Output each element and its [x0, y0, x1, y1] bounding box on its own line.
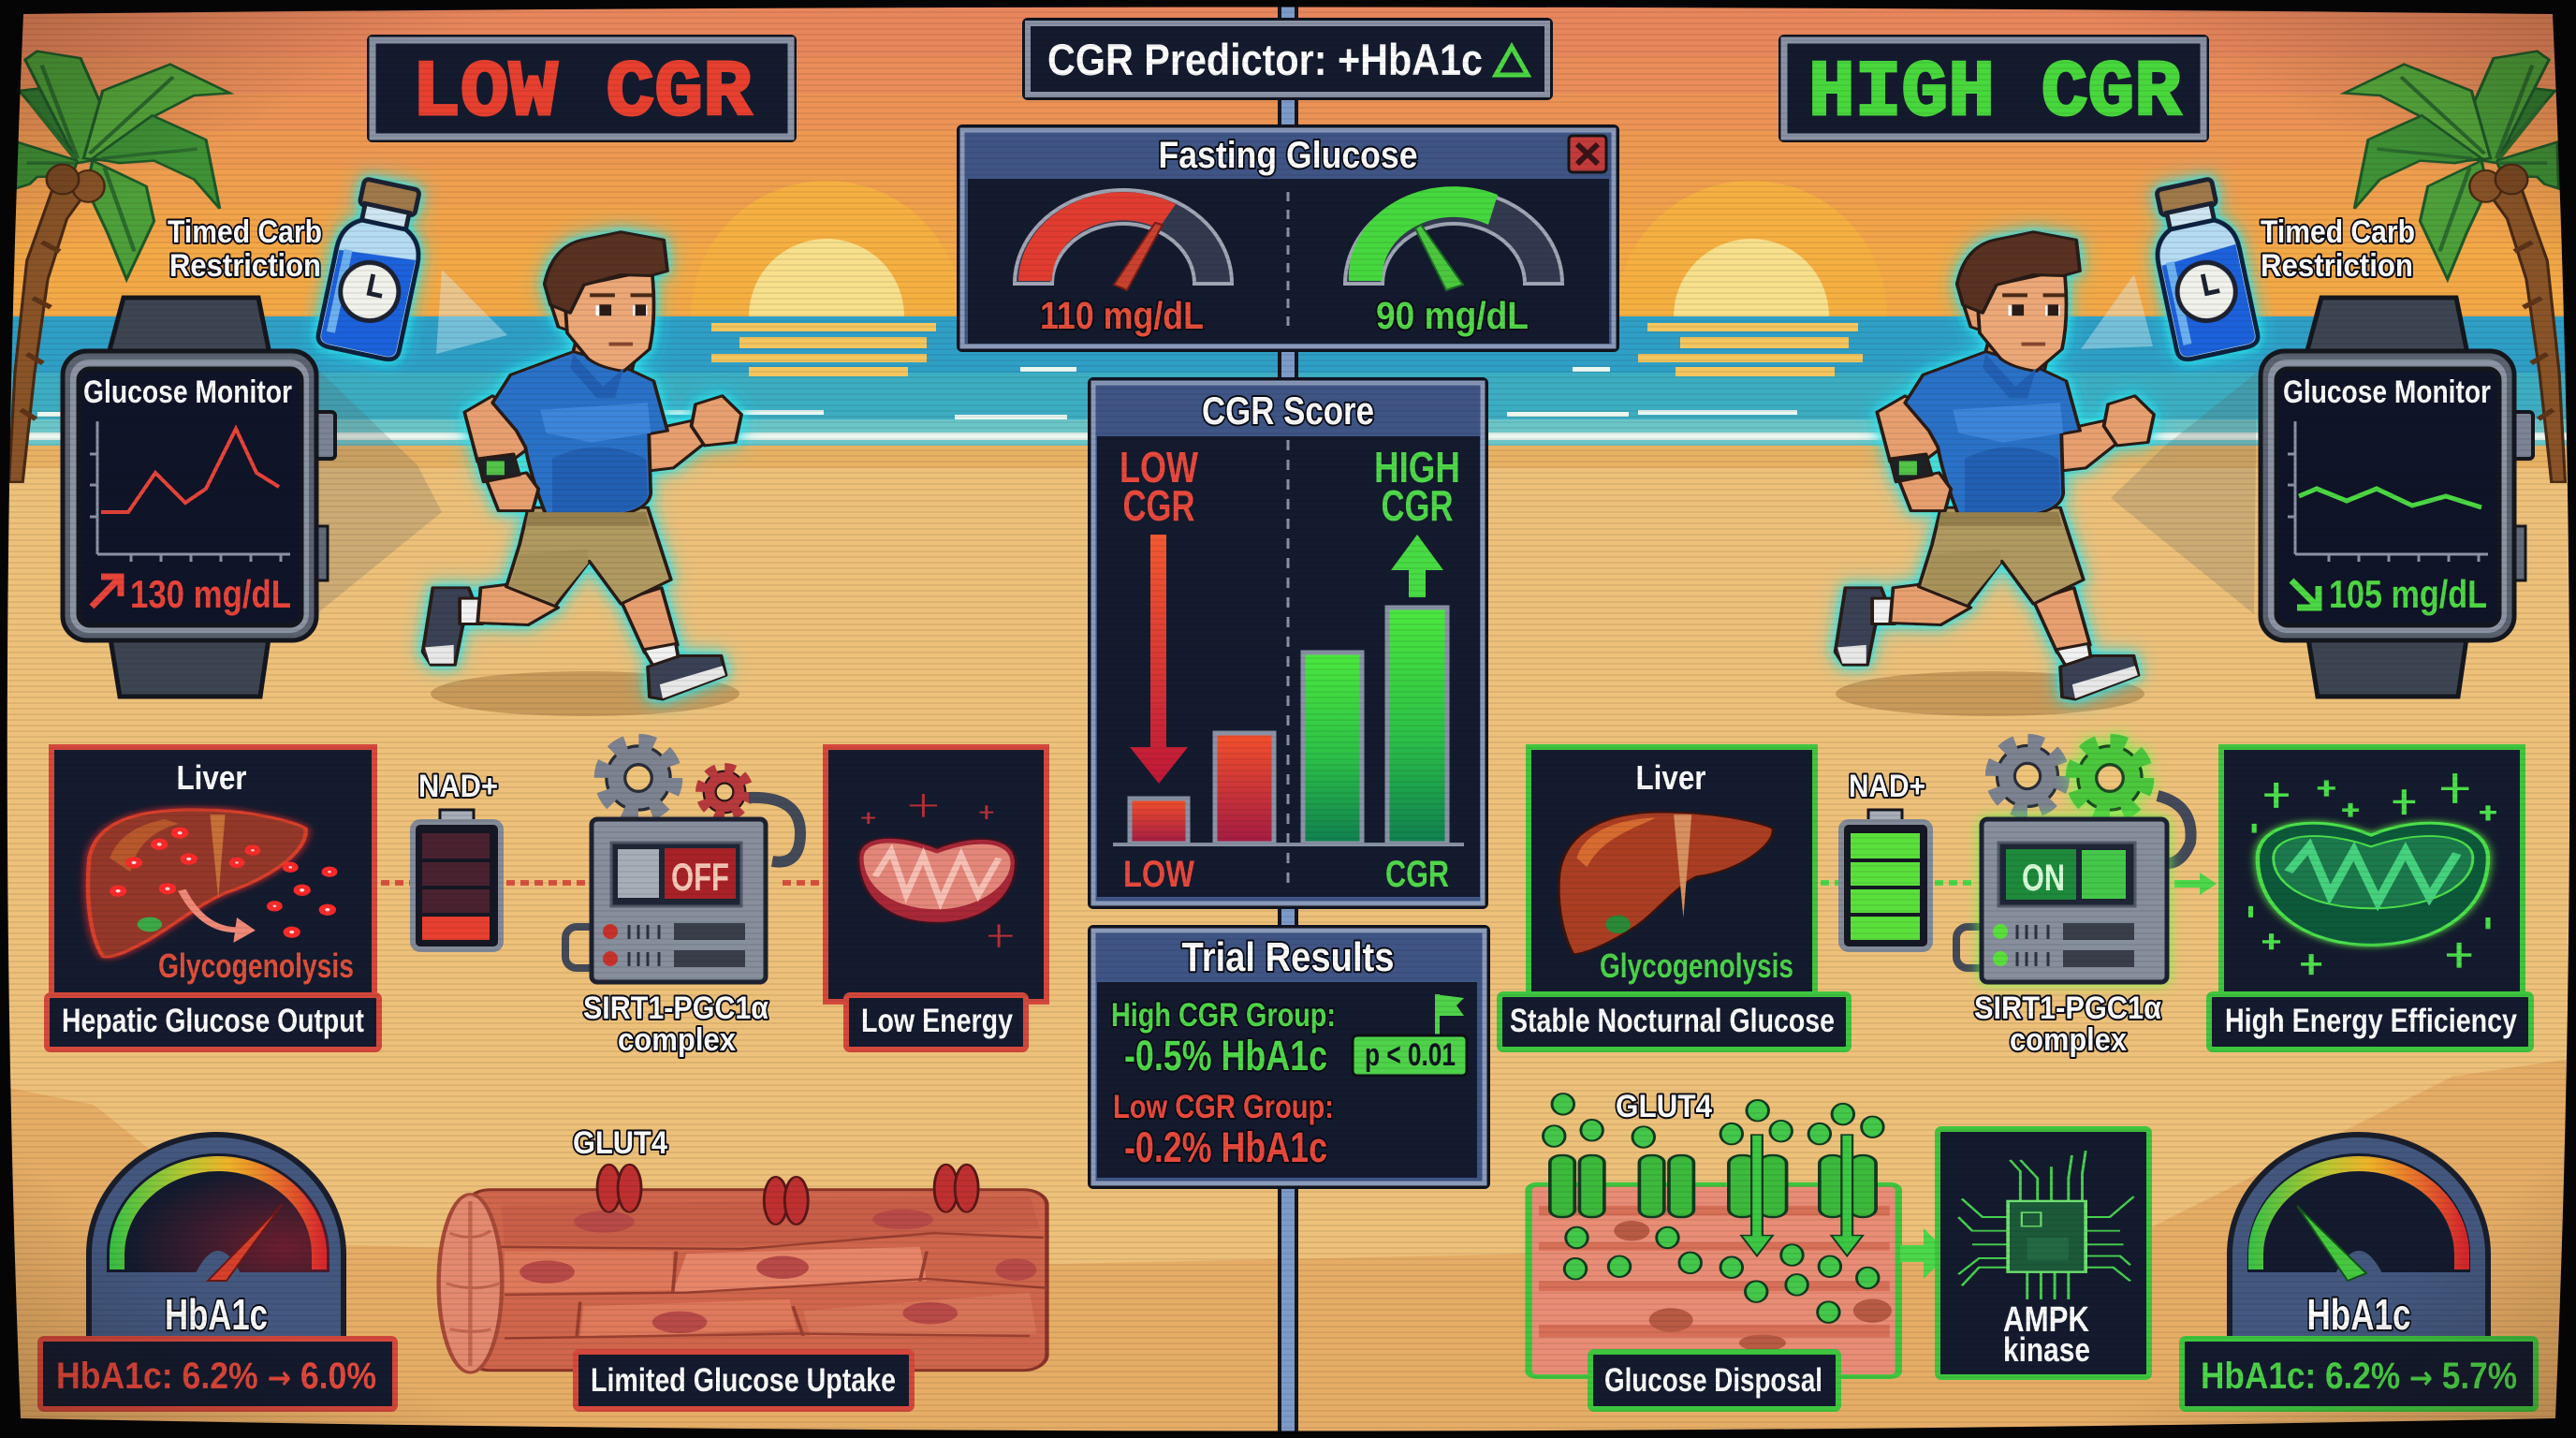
label: low energy: Low Energy: [861, 1003, 1013, 1039]
icon: SIRT1-PGC1a machine off: OFF: [671, 855, 729, 899]
panel: Fasting Glucose: [957, 125, 1619, 352]
label: HbA1c change high: HbA1c: 6.2% → 5.7%: [2201, 1356, 2517, 1397]
chart: low gauge: 110 mg/dL: [1040, 294, 1204, 337]
line chart: spiky glucose: [101, 429, 279, 512]
icon: inflamed liver: [88, 810, 334, 957]
icon: bottle with clock right: [2144, 176, 2260, 361]
icon: SIRT1-PGC1a machine on: [1956, 741, 2191, 1058]
panel: glucose watch left: Glucose Monitor: [83, 374, 292, 410]
panel: AMPK kinase: kinase: [2003, 1330, 2090, 1369]
panel: AMPK kinase: [1938, 1129, 2149, 1377]
icon: delta triangle: [1496, 47, 1528, 75]
icon: healthy liver: [1559, 813, 1773, 954]
panel: AMPK kinase: AMPK: [2003, 1300, 2089, 1340]
panel: liver low: [51, 747, 374, 1000]
label: HbA1c change low: HbA1c: 6.2% → 6.0%: [56, 1356, 376, 1397]
chart: HbA1c gauge right: [2230, 1135, 2488, 1341]
chart: low gauge: [1015, 190, 1232, 337]
icon: falling arrow: [2291, 580, 2319, 608]
panel: Trial Results: Low CGR Group:: [1113, 1089, 1334, 1125]
panel: high energy mitochondrion: [2221, 747, 2523, 998]
header: HIGH CGR: HIGH CGR: [1808, 50, 2182, 139]
callout: p value: p < 0.01: [1365, 1037, 1456, 1073]
character: runner right: [1836, 232, 2154, 699]
panel: low energy mitochondrion: [826, 747, 1046, 1002]
chart: high gauge: [1345, 186, 1562, 337]
icon: left palm tree: [9, 51, 230, 482]
icon: GLUT4 muscle limited: GLUT4: [573, 1125, 667, 1161]
panel: CGR Score: CGR: [1382, 481, 1453, 530]
panel: CGR Score: CGR: [1123, 481, 1194, 530]
icon: significance flag: [1435, 994, 1464, 1035]
header: LOW CGR: LOW CGR: [412, 50, 753, 139]
label: stable nocturnal glucose: [1500, 994, 1849, 1049]
label: limited glucose uptake: [576, 1352, 912, 1409]
chart: HbA1c gauge left: [89, 1135, 344, 1341]
chart: HbA1c gauge left: HbA1c: [165, 1290, 268, 1339]
panel: glucose watch right: 105 mg/dL: [2329, 572, 2487, 616]
icon: SIRT1-PGC1a machine off: complex: [618, 1022, 736, 1058]
icon: bottle with clock left: [316, 176, 432, 361]
label: high energy efficiency: High Energy Efficiency: [2225, 1003, 2517, 1039]
icon: NAD+ battery full: NAD+: [1849, 769, 1925, 804]
icon: rising arrow: [92, 577, 121, 607]
icon: SIRT1-PGC1a machine on: ON: [2022, 858, 2065, 899]
icon: SIRT1-PGC1a machine off: SIRT1-PGC1α: [583, 990, 768, 1026]
icon: NAD+ battery full: [1841, 769, 1930, 949]
icon: dim mitochondrion: [858, 794, 1016, 947]
panel: liver low: Liver: [176, 758, 247, 797]
panel: glucose watch left: [63, 298, 335, 697]
icon: GLUT4 muscle limited: [439, 1125, 1046, 1372]
text: timed carb restriction right: [2261, 214, 2415, 284]
label: HbA1c change low: [40, 1339, 395, 1409]
character: runner left: [423, 232, 741, 699]
label: glucose disposal: [1590, 1352, 1838, 1409]
arrow: to energy panel: [2174, 873, 2217, 895]
chart: high gauge: 90 mg/dL: [1376, 294, 1529, 337]
chart: HbA1c gauge right: HbA1c: [2306, 1290, 2411, 1339]
panel: CGR Score: CGR: [1385, 854, 1449, 895]
label: hepatic glucose output: Hepatic Glucose Output: [62, 1003, 364, 1039]
label: limited glucose uptake: Limited Glucose Uptake: [591, 1362, 896, 1399]
panel: CGR Score: HIGH: [1374, 443, 1460, 492]
panel: liver high: Liver: [1636, 758, 1705, 797]
line chart: stable glucose: [2299, 489, 2481, 507]
panel: CGR Score: CGR Score: [1202, 389, 1374, 433]
panel: Trial Results: -0.5% HbA1c: [1124, 1032, 1327, 1079]
icon: close button: [1569, 136, 1606, 172]
label: glucose disposal: Glucose Disposal: [1604, 1362, 1822, 1399]
icon: GLUT4 muscle disposal: [1529, 1089, 1898, 1377]
title: CGR Predictor: CGR Predictor: +HbA1c: [1047, 35, 1483, 84]
panel: glucose watch right: Glucose Monitor: [2283, 374, 2491, 410]
panel: Fasting Glucose: Fasting Glucose: [1159, 135, 1417, 176]
panel: Trial Results: High CGR Group:: [1111, 997, 1336, 1034]
text: timed carb restriction right: Restriction: [2261, 248, 2413, 284]
arrow: low red down: [1130, 535, 1188, 784]
text: timed carb restriction left: Timed Carb: [168, 214, 322, 250]
panel: liver high: Glycogenolysis: [1600, 946, 1793, 985]
title: CGR Predictor: [1022, 18, 1553, 100]
label: hepatic glucose output: [47, 995, 379, 1049]
panel: liver high: [1529, 747, 1815, 998]
icon: GLUT4 muscle disposal: GLUT4: [1616, 1089, 1712, 1124]
panel: glucose watch left: 130 mg/dL: [130, 572, 291, 616]
panel: glucose watch right: [2261, 298, 2533, 697]
label: HbA1c change high: [2182, 1339, 2536, 1409]
center divider pole: [1280, 0, 1296, 1438]
panel: CGR Score: LOW: [1123, 854, 1194, 895]
label: high energy efficiency: [2209, 994, 2531, 1049]
panel: liver low: Glycogenolysis: [158, 946, 354, 985]
text: timed carb restriction left: [168, 214, 322, 284]
icon: SIRT1-PGC1a machine on: complex: [2010, 1022, 2127, 1058]
arrow: high green up: [1391, 535, 1443, 597]
panel: Trial Results: -0.2% HbA1c: [1124, 1123, 1327, 1171]
panel: CGR Score: LOW: [1120, 443, 1198, 492]
label: low energy: [846, 995, 1026, 1049]
icon: NAD+ battery low: [413, 769, 501, 949]
panel: Trial Results: [1088, 925, 1490, 1189]
header: LOW CGR: [367, 35, 797, 142]
panel: high pathway: [1500, 741, 2531, 1058]
icon: SIRT1-PGC1a machine on: SIRT1-PGC1α: [1974, 990, 2161, 1026]
panel: Trial Results: Trial Results: [1181, 934, 1395, 980]
text: timed carb restriction left: Restriction: [169, 248, 321, 284]
panel: CGR Score: [1088, 377, 1488, 909]
icon: SIRT1-PGC1a machine off: [565, 741, 800, 1058]
label: stable nocturnal glucose: Stable Nocturnal Glucose: [1510, 1003, 1835, 1039]
icon: right palm tree: [2344, 51, 2565, 482]
bar chart: CGR score bars: [1113, 608, 1464, 844]
panel: low pathway: [47, 741, 1046, 1058]
icon: glowing mitochondrion: [2250, 773, 2496, 975]
text: timed carb restriction right: Timed Carb: [2261, 214, 2415, 250]
icon: circuit chip: [1958, 1151, 2134, 1299]
arrow: muscle to AMPK: [1900, 1228, 1949, 1279]
icon: NAD+ battery low: NAD+: [418, 769, 498, 804]
